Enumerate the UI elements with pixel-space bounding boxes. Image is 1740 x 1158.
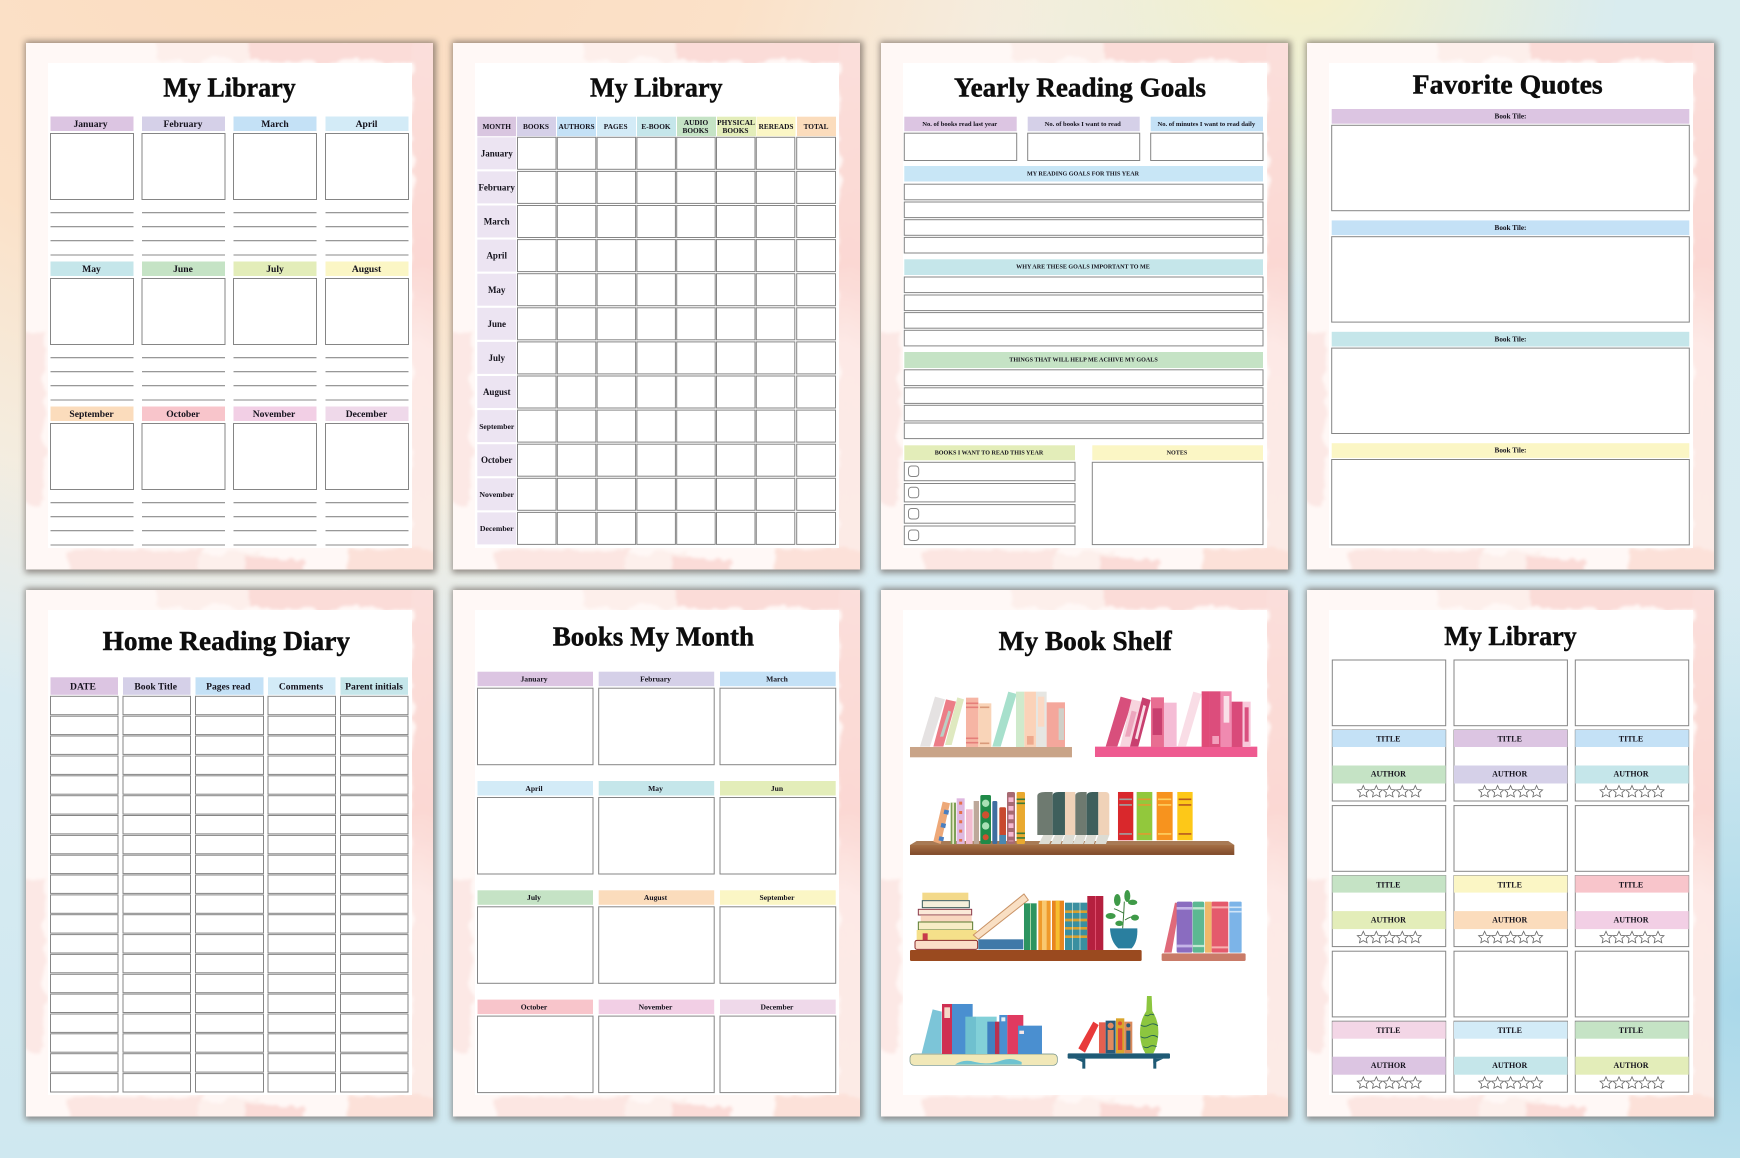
month boxes row 3: July [527, 893, 541, 902]
table header row [477, 117, 836, 136]
book cards row 1 [1332, 660, 1689, 801]
section: things that will help: THINGS THAT WILL HELP ME ACHIVE MY GOALS [1009, 358, 1158, 364]
month headers: September to December: December [346, 409, 388, 420]
illustration: navy shelf with books and green vase [1068, 996, 1170, 1069]
month labels column: February [478, 182, 515, 192]
section: things that will help [904, 352, 1263, 439]
month boxes row 3: September [759, 893, 795, 902]
section: my reading goals: MY READING GOALS FOR THIS YEAR [1027, 172, 1140, 178]
section: why goals are important: WHY ARE THESE GOALS IMPORTANT TO ME [1016, 264, 1150, 270]
quote block 4: Book Tile: [1495, 447, 1526, 455]
illustration: small shelf with colourful books [1162, 902, 1246, 961]
book cards row 1: TITLE [1497, 735, 1522, 744]
table header row: PHYSICAL [717, 118, 755, 127]
month boxes row 2: May [648, 784, 663, 793]
table header row: E-BOOK [641, 122, 671, 131]
book cards row 1: AUTHOR [1371, 770, 1406, 779]
book cards row 2: TITLE [1497, 880, 1522, 889]
month labels column: January [481, 148, 513, 158]
month headers: May to August: July [266, 264, 284, 275]
panel: My Library monthly boxes [18, 37, 448, 583]
book cards row 1: TITLE [1376, 735, 1401, 744]
diary column headers: Parent initials [345, 682, 403, 692]
table cells [518, 137, 836, 544]
panel: Home Reading Diary [18, 584, 448, 1130]
book cards row 1: TITLE [1619, 735, 1643, 744]
table header row: PAGES [604, 122, 628, 131]
diary column headers [50, 677, 408, 695]
illustration: pink bookshelf [1095, 691, 1257, 757]
diary column headers: Pages read [206, 682, 251, 692]
three number boxes: No. of books read last year [922, 121, 997, 128]
book cards row 3: AUTHOR [1492, 1061, 1527, 1070]
month boxes row 2: Jun [771, 784, 784, 793]
table header row: REREADS [759, 122, 793, 131]
quote block 1 [1332, 109, 1689, 211]
month boxes row 2: April [525, 784, 543, 793]
quote block 1: Book Tile: [1495, 112, 1526, 120]
book cards row 3: TITLE [1497, 1026, 1522, 1035]
section: my reading goals [904, 166, 1263, 253]
book cards row 2: AUTHOR [1371, 915, 1406, 924]
table header row: BOOKS [683, 126, 708, 135]
month labels column: December [480, 524, 514, 533]
book cards row 2: AUTHOR [1613, 915, 1649, 924]
illustration: pastel bookshelf [910, 692, 1072, 757]
book cards row 3 [1332, 951, 1689, 1092]
book cards row 2 [1332, 806, 1689, 947]
panel: My Library table [445, 37, 875, 583]
panel: Yearly Reading Goals [873, 37, 1303, 583]
month headers: September to December: November [253, 409, 296, 420]
three number boxes [904, 117, 1263, 160]
panel: My Book Shelf [873, 584, 1303, 1130]
three number boxes: No. of books I want to read [1045, 121, 1121, 128]
month headers: September to December [50, 406, 408, 421]
month headers: May to August: August [352, 264, 382, 275]
book cards row 2: TITLE [1619, 880, 1643, 889]
illustration: shelf with book stack and plant [910, 890, 1142, 961]
section: why goals are important [904, 259, 1263, 346]
diary column headers: Book Title [134, 682, 178, 692]
month labels column: June [487, 319, 506, 329]
month boxes row 1 [478, 672, 836, 765]
title: My Library: My Library [590, 72, 723, 102]
month headers: May to August [50, 262, 408, 276]
table header row: AUTHORS [558, 122, 595, 131]
section: books to read checklist: BOOKS I WANT TO READ THIS YEAR [935, 450, 1044, 456]
month labels column: May [488, 285, 506, 295]
month labels column: August [483, 387, 510, 397]
month boxes row 4: December [761, 1002, 794, 1011]
illustration: brown wooden bookshelf [910, 792, 1234, 855]
month headers: January to April: February [164, 119, 203, 130]
quote block 3: Book Tile: [1495, 335, 1526, 343]
table header row: AUDIO [684, 118, 708, 127]
quote block 2 [1332, 220, 1689, 322]
month boxes row 4 [478, 1000, 836, 1093]
month boxes row 1: January [520, 674, 548, 684]
panel: Books My Month [445, 584, 875, 1130]
month boxes row 1: February [640, 674, 671, 684]
book cards row 3: AUTHOR [1371, 1061, 1406, 1070]
month boxes row 1: March [766, 674, 789, 684]
month headers: May to August: June [173, 264, 194, 275]
book cards row 3: AUTHOR [1613, 1061, 1649, 1070]
month labels column: April [486, 251, 507, 261]
book cards row 2: AUTHOR [1492, 915, 1527, 924]
month headers: September to December: September [69, 409, 114, 420]
diary column headers: Comments [279, 682, 323, 692]
month labels column: March [484, 216, 510, 226]
book cards row 1: AUTHOR [1492, 770, 1527, 779]
table header row: TOTAL [804, 122, 829, 131]
title: My Library: My Library [163, 72, 296, 102]
quote block 4 [1332, 443, 1689, 545]
month headers: May to August: May [82, 264, 101, 275]
table header row: MONTH [483, 122, 511, 131]
month boxes row 3 [478, 890, 836, 983]
month boxes row 3: August [644, 893, 668, 902]
panel: My Library book cards [1299, 584, 1729, 1130]
diary column headers: DATE [70, 682, 96, 692]
title: Yearly Reading Goals: Yearly Reading Goals [954, 72, 1206, 102]
month boxes row 4: October [521, 1002, 548, 1011]
title: My Library: My Library [1444, 621, 1577, 651]
month labels column: October [481, 455, 512, 465]
section: books to read checklist [904, 445, 1075, 545]
diary rows [50, 696, 408, 1092]
month boxes row 4: November [639, 1002, 673, 1011]
book cards row 2: TITLE [1376, 880, 1401, 889]
book cards row 1: AUTHOR [1613, 770, 1649, 779]
panel: Favorite Quotes [1299, 37, 1729, 583]
title: Home Reading Diary: Home Reading Diary [103, 626, 350, 656]
month headers: January to April: March [261, 119, 289, 130]
book cards row 3: TITLE [1376, 1026, 1401, 1035]
quote block 2: Book Tile: [1495, 224, 1526, 232]
month labels column [477, 137, 516, 544]
month headers: January to April: April [356, 119, 378, 130]
three number boxes: No. of minutes I want to read daily [1157, 121, 1256, 128]
month boxes and lines, row 3 [50, 424, 408, 545]
month headers: January to April [50, 116, 408, 131]
month headers: September to December: October [166, 409, 201, 420]
month boxes and lines, row 1 [50, 134, 408, 255]
title: Favorite Quotes: Favorite Quotes [1413, 69, 1603, 99]
month labels column: July [488, 353, 505, 363]
section: notes [1092, 445, 1263, 545]
quote block 3 [1332, 332, 1689, 434]
month labels column: November [479, 490, 515, 499]
table header row: BOOKS [523, 122, 549, 131]
title: My Book Shelf: My Book Shelf [999, 626, 1173, 656]
title: Books My Month: Books My Month [553, 622, 754, 652]
month boxes row 2 [478, 781, 836, 874]
section: notes: NOTES [1167, 450, 1188, 456]
illustration: blue books on cream shelf [910, 1004, 1057, 1065]
month headers: January to April: January [73, 119, 108, 130]
table header row: BOOKS [723, 126, 748, 135]
book cards row 3: TITLE [1619, 1026, 1643, 1035]
month boxes and lines, row 2 [50, 278, 408, 400]
month labels column: September [479, 422, 515, 431]
